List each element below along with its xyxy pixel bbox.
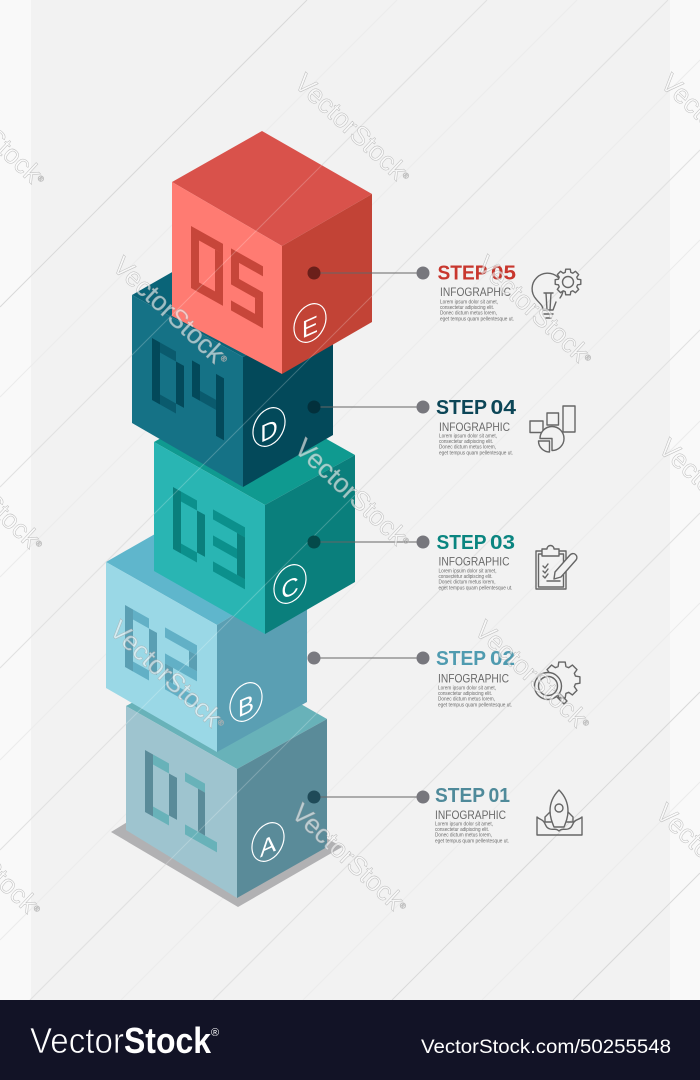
text block step 03: INFOGRAPHIC (438, 554, 510, 568)
footer logo (30, 1020, 219, 1061)
badge D: D (260, 414, 278, 449)
text block step 02 (436, 648, 515, 708)
text block step 03: eget tempus quam pellentesque ut. (438, 586, 513, 592)
text block step 04: STEP (436, 397, 487, 419)
icon: charts (530, 406, 575, 452)
icon: rocket (537, 790, 582, 835)
text block step 05: Donec dictum metus lorem, (440, 310, 497, 316)
text block step 04: 04 (490, 397, 517, 419)
badge A: A (260, 829, 276, 863)
watermarks: VectorStock (471, 249, 595, 368)
badge A (246, 817, 290, 867)
connector step 03 (308, 536, 430, 548)
badge B (224, 677, 268, 727)
connector step 05 (308, 266, 430, 280)
cube 01 (126, 656, 327, 898)
watermarks: ® (34, 538, 44, 549)
badge B: B (238, 689, 254, 723)
watermarks: VectorStock (104, 614, 228, 733)
footer logo: ® (211, 1027, 219, 1039)
watermarks: ® (398, 900, 408, 911)
watermarks: ® (583, 352, 593, 363)
icon: light bulb and gear (532, 269, 581, 318)
text block step 04: consectetur adipiscing elit. (439, 439, 493, 445)
watermarks: VectorStock (286, 797, 410, 916)
text block step 02: INFOGRAPHIC (438, 672, 509, 686)
cube 03 (154, 392, 355, 634)
text block step 05: Lorem ipsum dolor sit amet, (440, 300, 498, 306)
text block step 01: Lorem ipsum dolor sit amet, (435, 822, 493, 828)
text block step 01: consectetur adipiscing elit. (435, 827, 489, 833)
icon: magnifier and gear (534, 662, 580, 704)
connector step 04 (308, 400, 430, 414)
watermarks (0, 67, 700, 923)
text block step 05: INFOGRAPHIC (440, 285, 511, 299)
number 03 (173, 487, 245, 589)
text block step 02: Donec dictum metus lorem, (438, 696, 495, 702)
badge D (247, 402, 291, 452)
footer bar (0, 1000, 700, 1080)
text block step 05: STEP (438, 262, 488, 284)
text block step 04: Lorem ipsum dolor sit amet, (439, 434, 497, 440)
text block step 01: 01 (488, 785, 510, 807)
number 04 (152, 338, 224, 440)
text block step 04: Donec dictum metus lorem, (439, 444, 496, 450)
watermarks: VectorStock (289, 67, 413, 186)
text block step 05: 05 (491, 262, 516, 284)
text block step 04 (436, 397, 517, 456)
number 02 (125, 605, 197, 707)
badge C (268, 559, 312, 609)
connector step 01 (308, 790, 430, 804)
text block step 01: Donec dictum metus lorem, (435, 832, 492, 838)
watermarks: ® (401, 170, 411, 181)
text block step 05: consectetur adipiscing elit. (440, 305, 494, 311)
footer url: VectorStock.com/50255548 (421, 1037, 671, 1058)
watermarks: ® (219, 353, 229, 364)
text block step 05 (438, 262, 516, 322)
watermarks: ® (216, 717, 226, 728)
badge E: E (302, 310, 318, 344)
watermarks: ® (36, 173, 46, 184)
cube 02 (106, 510, 307, 752)
watermarks: VectorStock (289, 432, 413, 551)
cube 04 (132, 243, 333, 487)
icon: clipboard (536, 546, 577, 589)
text block step 02: 02 (490, 648, 515, 670)
footer logo: Vector (30, 1020, 124, 1061)
text block step 02: Lorem ipsum dolor sit amet, (438, 686, 496, 692)
text block step 01: INFOGRAPHIC (435, 808, 506, 822)
text block step 03 (436, 532, 515, 592)
number 01 (145, 750, 217, 852)
text block step 01: eget tempus quam pellentesque ut. (435, 838, 509, 844)
watermarks: ® (32, 903, 42, 914)
text block step 02: eget tempus quam pellentesque ut. (438, 702, 512, 708)
watermarks: ® (401, 535, 411, 546)
connector step 02 (308, 652, 430, 664)
text block step 02: consectetur adipiscing elit. (438, 691, 492, 697)
text block step 03: Lorem ipsum dolor sit amet, (438, 568, 497, 574)
footer logo: Stock (124, 1020, 212, 1061)
watermarks: ® (581, 717, 591, 728)
text block step 03: Donec dictum metus lorem, (438, 580, 496, 586)
badge E (288, 298, 332, 348)
cube shadow (111, 790, 342, 907)
cube 05 (172, 131, 372, 374)
watermarks: VectorStock (469, 614, 593, 733)
text block step 03: consectetur adipiscing elit. (438, 574, 493, 580)
watermarks: VectorStock (107, 250, 231, 369)
text block step 01: STEP (435, 785, 485, 807)
text block step 03: STEP (436, 532, 486, 554)
number 05 (191, 226, 263, 328)
text block step 03: 03 (490, 532, 515, 554)
text block step 04: INFOGRAPHIC (439, 420, 510, 434)
text block step 02: STEP (436, 648, 486, 670)
badge C: C (281, 571, 299, 606)
text block step 04: eget tempus quam pellentesque ut. (439, 450, 513, 456)
text block step 01 (435, 785, 510, 844)
text block step 05: eget tempus quam pellentesque ut. (440, 316, 514, 322)
